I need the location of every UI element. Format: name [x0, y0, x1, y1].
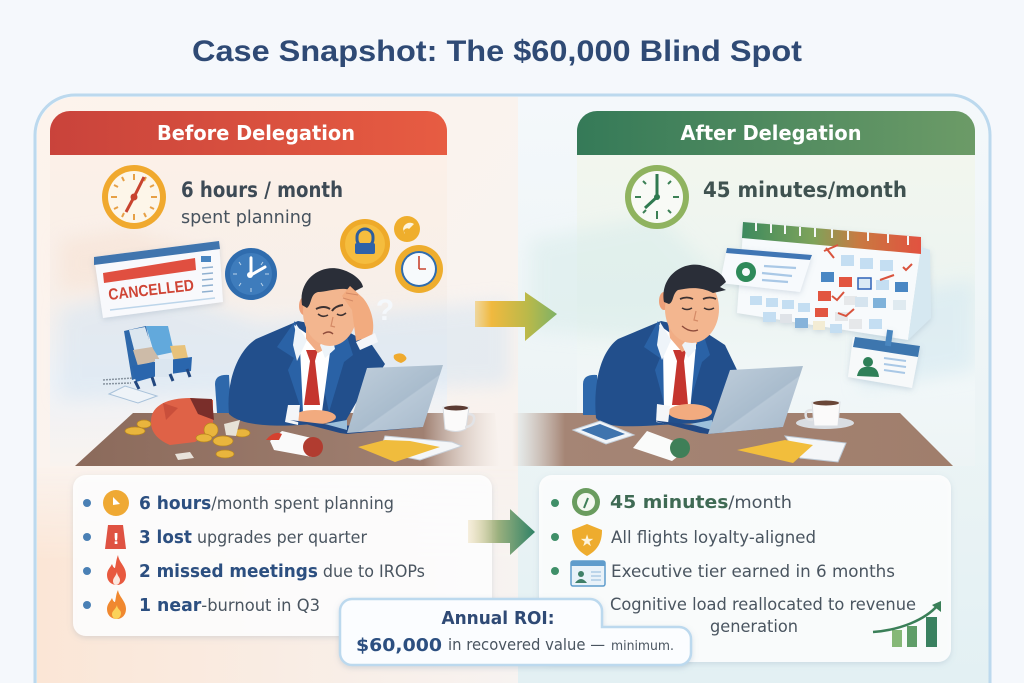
- list item: 3 lost upgrades: !: [113, 530, 119, 548]
- icon: airplane seat: [124, 326, 192, 389]
- icon: laptop: [651, 366, 803, 434]
- icon: rolled document: [266, 431, 323, 457]
- title: Case Snapshot: The $60,000 Blind Spot: [192, 35, 802, 68]
- icon: small coin: [394, 216, 420, 242]
- heading: after delegation: After Delegation: [680, 121, 862, 145]
- callout: annual ROI: [340, 599, 691, 665]
- illustration: relaxed executive: [583, 265, 738, 426]
- chart: growth bars with arrow: [873, 601, 941, 647]
- list item: 2 missed meetings: 2 missed meetings due to IROPs: [139, 561, 425, 582]
- desk: after: [512, 413, 953, 466]
- arrow: list before to after: [468, 509, 535, 555]
- icon: clock coin: [395, 245, 443, 293]
- panel: after delegation: [512, 111, 975, 466]
- callout: annual ROI: minimum.: [611, 639, 674, 654]
- callout: annual ROI: $60,000: [356, 635, 442, 656]
- list item: cognitive load: Cognitive load reallocated to revenue: [610, 595, 916, 615]
- list item: cognitive load: [610, 595, 916, 637]
- icon: coffee cup: [443, 406, 474, 432]
- stat: 6 hours per month: 6 hours / month: [181, 178, 343, 202]
- illustration: stressed executive: [215, 268, 406, 426]
- list item: 6 hours: [83, 490, 394, 516]
- icon: green clock: [625, 165, 689, 229]
- heading: after delegation: [577, 111, 975, 155]
- stat: 6 hours per month: spent planning: [181, 207, 312, 228]
- icon: cancelled ticket: CANCELLED: [108, 277, 195, 304]
- list item: 45 minutes: 45 minutes /month: [610, 492, 792, 513]
- panel: after list: [539, 475, 951, 662]
- list item: loyalty-aligned flights: [551, 524, 816, 556]
- heading: before delegation: [50, 111, 447, 155]
- icon: id badge: [848, 330, 920, 388]
- callout: annual ROI: Annual ROI:: [442, 608, 554, 629]
- icon: blue clock: [225, 248, 277, 300]
- icon: coffee cup and saucer: [796, 400, 854, 429]
- icon: tablet: [573, 421, 634, 444]
- icon: document card: [720, 248, 812, 292]
- icon: folder and papers: [358, 436, 462, 462]
- icon: scattered papers: [103, 378, 157, 403]
- list item: 3 lost upgrades: [83, 525, 367, 549]
- icon: rolled document: [633, 431, 690, 461]
- panel: before list: [73, 475, 492, 636]
- icon: laptop: [290, 365, 443, 434]
- list item: loyalty-aligned flights: All flights loyalty-aligned: [611, 528, 816, 548]
- heading: before delegation: Before Delegation: [157, 121, 355, 145]
- icon: cancelled ticket: [94, 241, 223, 318]
- stat: 45 minutes per month: 45 minutes/month: [703, 178, 907, 202]
- list item: cognitive load: generation: [710, 617, 798, 637]
- list item: executive tier: Executive tier earned in 6 months: [611, 562, 895, 582]
- list item: 1 near-burnout: 1 near-burnout in Q3: [139, 595, 320, 616]
- icon: orange clock: [102, 165, 166, 229]
- list item: 1 near-burnout: [83, 590, 320, 619]
- list item: 45 minutes: [551, 488, 792, 516]
- list item: 3 lost upgrades: 3 lost upgrades per quarter: [139, 527, 367, 548]
- icon: lock coin: [340, 219, 390, 269]
- desk: before: [75, 413, 500, 466]
- list item: 6 hours: 6 hours/month spent planning: [139, 493, 394, 514]
- panel: before delegation: [50, 111, 510, 466]
- icon: question mark: ?: [376, 294, 394, 327]
- list item: loyalty-aligned flights: ★: [580, 531, 594, 550]
- icon: folder and papers: [737, 436, 846, 463]
- list item: 2 missed meetings: [83, 555, 425, 585]
- arrow: before to after: [475, 292, 557, 341]
- stat: 6 hours per month: [181, 178, 343, 228]
- callout: annual ROI: in recovered value —: [448, 635, 605, 654]
- icon: calendar: [737, 222, 931, 340]
- icon: broken piggy bank and coins: [125, 398, 250, 460]
- list item: executive tier: [551, 561, 895, 586]
